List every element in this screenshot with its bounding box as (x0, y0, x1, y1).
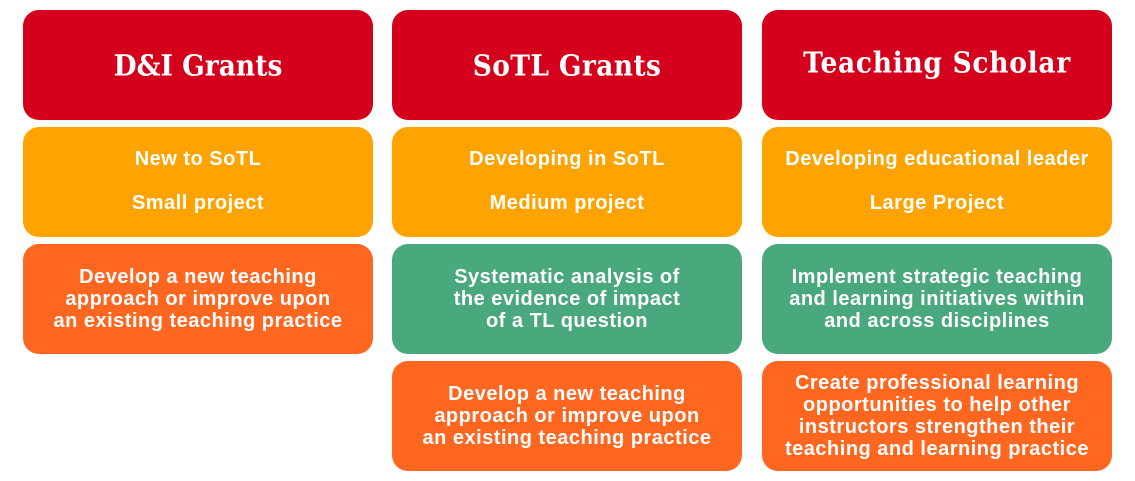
panel: SoTL analysis: the evidence of impact (454, 288, 680, 310)
heading: Teaching Scholar (762, 10, 1112, 120)
heading: SoTL Grants (392, 10, 742, 120)
panel: SoTL analysis (392, 244, 742, 354)
heading: D&I Grants: D&I Grants (114, 50, 282, 83)
panel: D&I level: Small project (132, 192, 264, 214)
panel: Teaching Scholar initiatives: and across disciplines (824, 310, 1050, 332)
panel: Teaching Scholar initiatives (762, 244, 1112, 354)
panel: Teaching Scholar professional learning: teaching and learning practice (785, 438, 1089, 460)
panel: SoTL analysis: of a TL question (486, 310, 648, 332)
heading: SoTL Grants: SoTL Grants (473, 50, 661, 83)
panel: SoTL level: Medium project (490, 192, 644, 214)
panel: D&I level (23, 127, 373, 237)
panel: SoTL level (392, 127, 742, 237)
panel: Teaching Scholar professional learning: instructors strengthen their (799, 416, 1075, 438)
panel: SoTL goal: Develop a new teaching (448, 383, 686, 405)
panel: SoTL analysis: Systematic analysis of (454, 266, 680, 288)
heading: Teaching Scholar: Teaching Scholar (803, 47, 1071, 80)
panel: SoTL goal: approach or improve upon (434, 405, 700, 427)
panel: D&I goal: Develop a new teaching (79, 266, 317, 288)
panel: SoTL level: Developing in SoTL (469, 148, 665, 170)
panel: SoTL goal: an existing teaching practice (422, 427, 712, 449)
panel: D&I goal (23, 244, 373, 354)
panel: D&I goal: approach or improve upon (65, 288, 331, 310)
panel: Teaching Scholar professional learning: Create professional learning (795, 372, 1079, 394)
panel: Teaching Scholar level (762, 127, 1112, 237)
panel: Teaching Scholar level: Large Project (870, 192, 1004, 214)
panel: D&I level: New to SoTL (135, 148, 261, 170)
heading: D&I Grants (23, 10, 373, 120)
panel: Teaching Scholar level: Developing educational leader (785, 148, 1089, 170)
panel: SoTL goal (392, 361, 742, 471)
panel: D&I goal: an existing teaching practice (53, 310, 343, 332)
panel: Teaching Scholar initiatives: and learning initiatives within (789, 288, 1085, 310)
panel: Teaching Scholar initiatives: Implement strategic teaching (792, 266, 1082, 288)
panel: Teaching Scholar professional learning: opportunities to help other (803, 394, 1071, 416)
panel: Teaching Scholar professional learning (762, 361, 1112, 471)
